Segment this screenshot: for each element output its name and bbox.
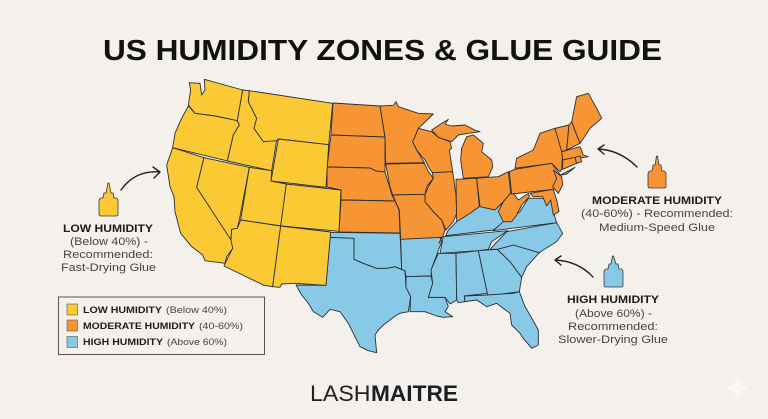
icon: orange glue bottle (648, 156, 666, 188)
low humidity states (167, 79, 341, 287)
icon: blue glue bottle (604, 256, 623, 287)
low humidity text: (Below 40%) - (70, 236, 148, 248)
legend row: low humidity (67, 304, 227, 316)
title: US HUMIDITY ZONES & GLUE GUIDE (103, 35, 662, 67)
icon: yellow glue bottle (99, 183, 118, 216)
icon: faint sparkle (725, 376, 749, 400)
callout: low humidity (61, 167, 160, 274)
legend row: moderate humidity: (40-60%) (199, 321, 243, 332)
high humidity text: Slower-Drying Glue (558, 334, 668, 346)
logo: LASHMAITRE: MAITRE (371, 381, 458, 406)
high humidity text (558, 294, 668, 346)
low humidity text: Recommended: (63, 249, 153, 261)
low humidity text: Fast-Drying Glue (61, 262, 156, 274)
moderate humidity midwest and northeast states (380, 93, 602, 243)
callout: moderate humidity (581, 145, 733, 234)
map of US humidity zones (167, 79, 602, 353)
legend (58, 297, 264, 354)
legend row: low humidity: (Below 40%) (166, 305, 227, 316)
legend row: moderate humidity (67, 320, 243, 332)
arrow to west coast (121, 167, 160, 190)
moderate humidity text: Medium-Speed Glue (599, 222, 715, 234)
moderate humidity text: (40-60%) - Recommended: (581, 208, 733, 220)
legend row: high humidity (67, 336, 227, 348)
logo: LASHMAITRE (310, 381, 458, 406)
low humidity text: LOW HUMIDITY (63, 223, 154, 235)
high humidity text: HIGH HUMIDITY (567, 294, 660, 306)
high humidity text: (Above 60%) - (575, 308, 652, 320)
legend row: moderate humidity: MODERATE HUMIDITY (83, 321, 196, 332)
moderate humidity plains states (327, 103, 400, 233)
moderate humidity text (581, 195, 733, 234)
legend row: low humidity: LOW HUMIDITY (83, 305, 163, 316)
callout: high humidity (555, 256, 668, 346)
low humidity text (61, 223, 156, 274)
arrow to southeast (555, 256, 593, 277)
high humidity states (296, 198, 563, 353)
logo: LASHMAITRE: LASH (310, 381, 370, 406)
high humidity text: Recommended: (568, 321, 658, 333)
legend row: high humidity: (Above 60%) (167, 337, 227, 348)
arrow to northeast (598, 145, 637, 167)
moderate humidity text: MODERATE HUMIDITY (592, 195, 723, 207)
legend row: high humidity: HIGH HUMIDITY (83, 337, 164, 348)
